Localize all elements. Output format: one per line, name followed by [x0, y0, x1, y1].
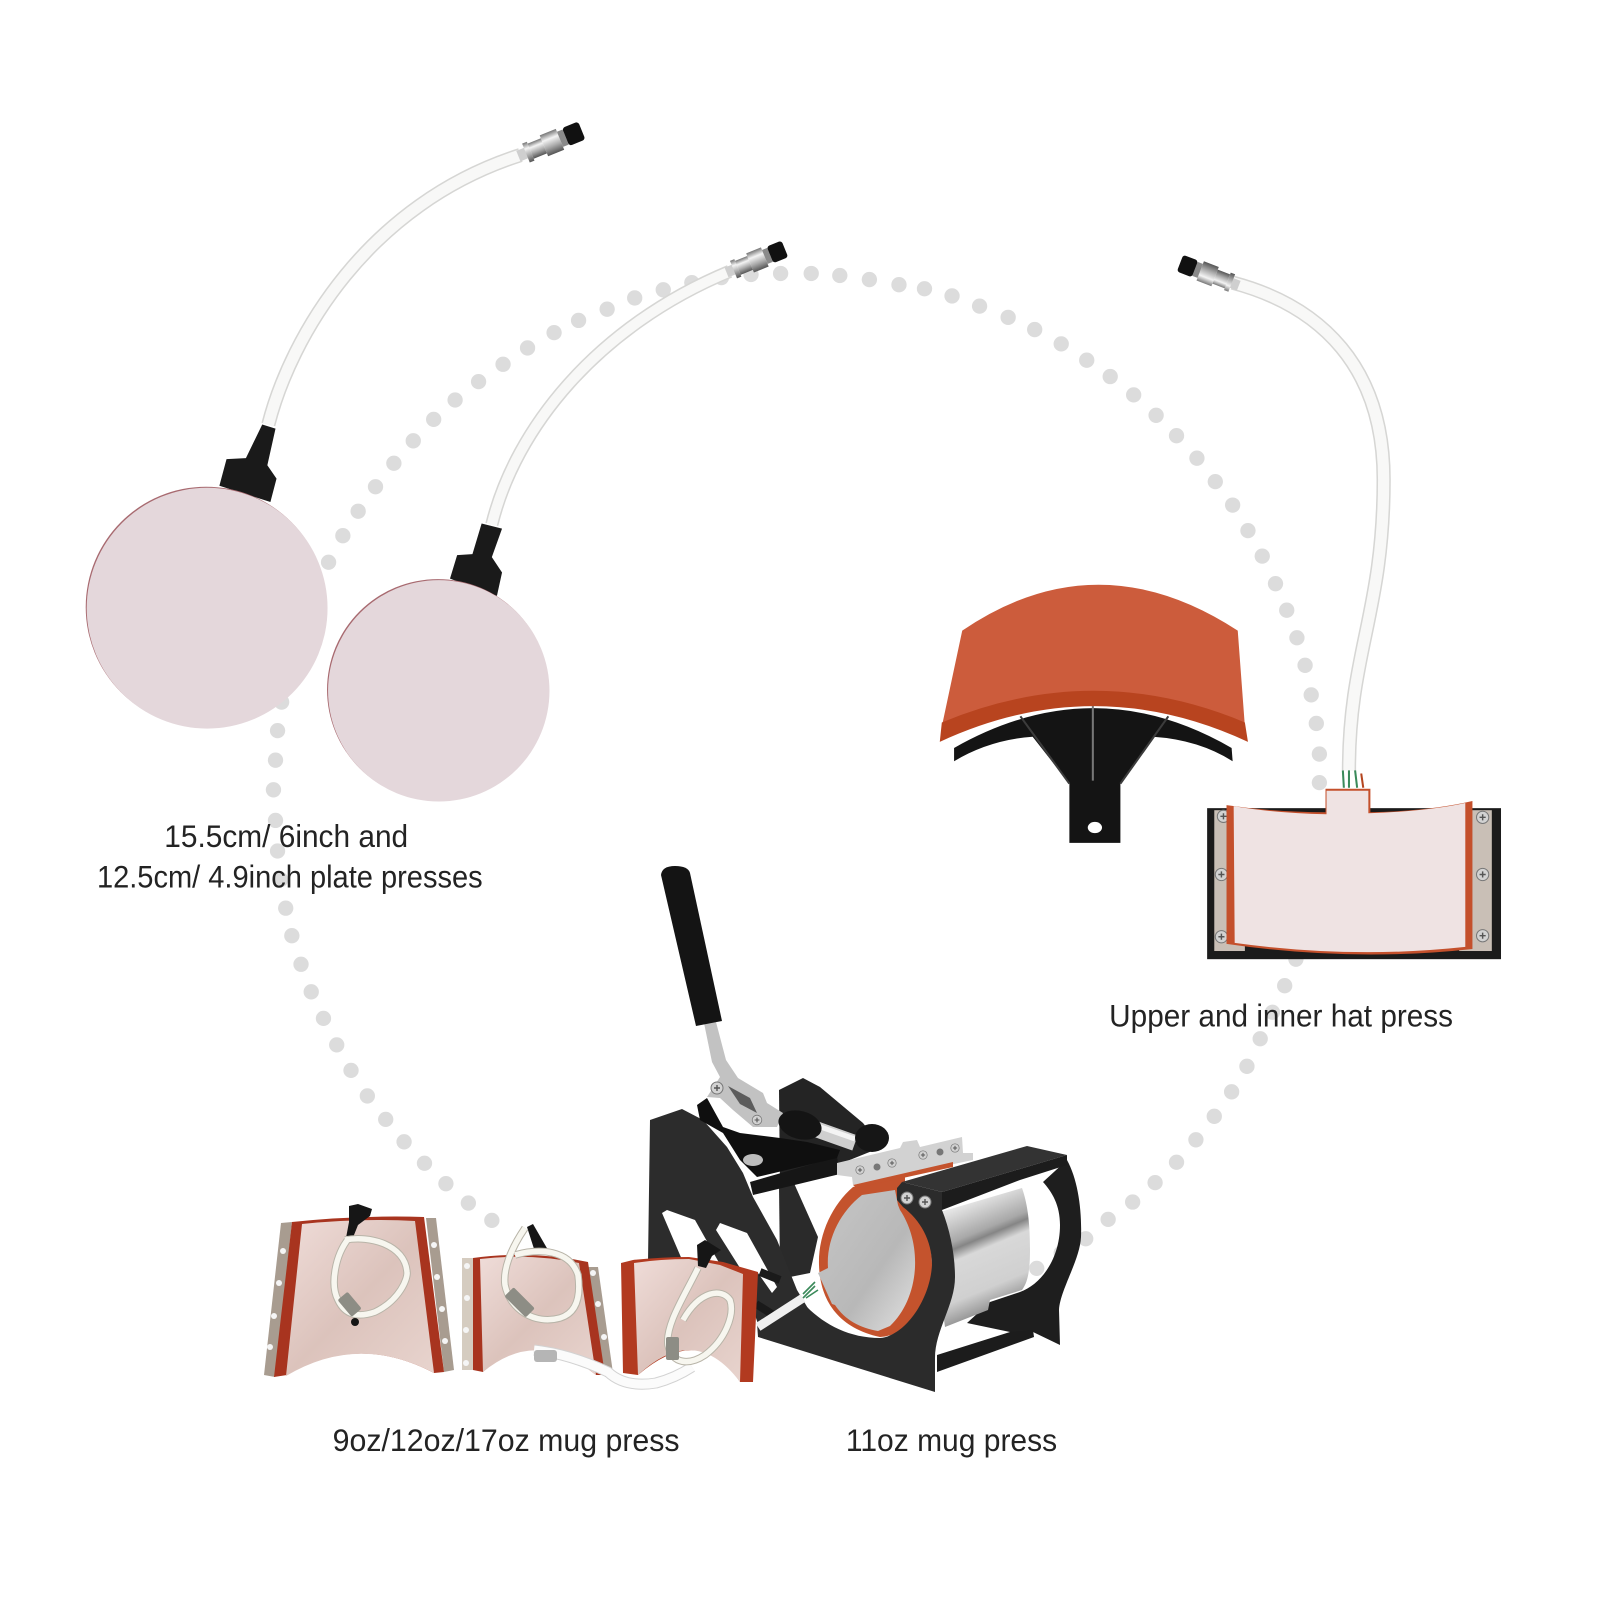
large plate press 15.5cm: [86, 120, 586, 729]
plate press label: [97, 818, 483, 895]
plate press label: 15.5cm/ 6inch and: [164, 818, 408, 854]
mug wrap 1: [264, 1204, 454, 1377]
plate press label: 12.5cm/ 4.9inch plate presses: [97, 859, 483, 895]
right frame plate: [967, 1160, 1081, 1345]
mug wrap 3: [621, 1240, 758, 1382]
black mount: [697, 1098, 840, 1177]
mug wrap 2: [462, 1224, 613, 1377]
small rods between plates: [756, 1272, 780, 1316]
dotted ring: [266, 266, 1327, 1276]
rear frame plate: [779, 1078, 882, 1185]
crossbar: [750, 1157, 840, 1195]
upper and inner hat press label: Upper and inner hat press: [1109, 998, 1453, 1034]
11oz mug press machine: [648, 866, 1081, 1392]
orange heating ring: [819, 1172, 932, 1337]
roller with joint and knob: [810, 1127, 855, 1143]
small plate press 12.5cm: [327, 239, 789, 802]
lower hat press with cable: [1176, 254, 1501, 959]
mug press label: 9oz/12oz/17oz mug press: [333, 1422, 680, 1458]
black handle: [661, 866, 722, 1026]
silver rail: [837, 1137, 973, 1185]
front frame plate: [757, 1182, 955, 1392]
base bar: [937, 1330, 1034, 1372]
lever and clamp: [704, 1022, 783, 1127]
11oz mug press label: 11oz mug press: [846, 1422, 1057, 1458]
power cable into ring: [758, 1298, 803, 1327]
top bar: [902, 1146, 1067, 1192]
left frame plate with slots: [648, 1109, 815, 1330]
silver drum: [930, 1188, 1030, 1327]
white connecting cable: [534, 1350, 692, 1384]
upper hat press: [940, 585, 1248, 843]
